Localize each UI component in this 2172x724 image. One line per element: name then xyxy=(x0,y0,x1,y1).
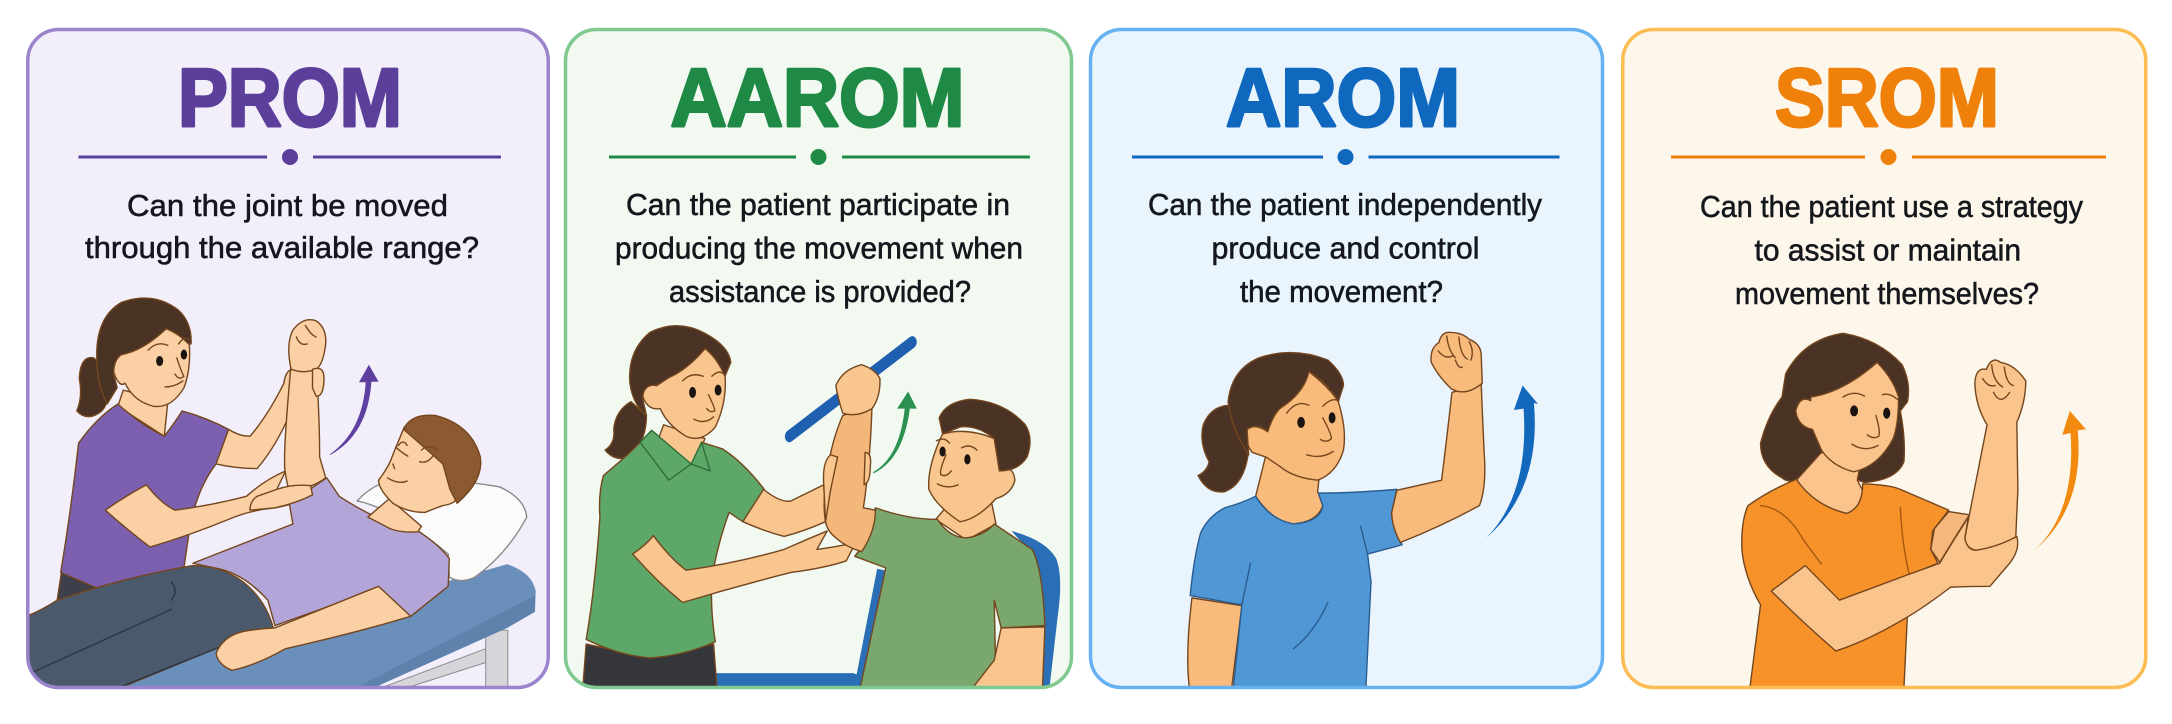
patient fist on stick xyxy=(836,365,880,415)
chair xyxy=(716,530,1060,686)
divider PROM xyxy=(78,149,501,165)
arrow: self-assisted lift xyxy=(2034,411,2086,551)
question SROM: to assist or maintain xyxy=(1754,234,2021,268)
treatment table xyxy=(107,564,536,689)
question SROM xyxy=(1700,190,2084,311)
divider AROM xyxy=(1132,149,1560,165)
panel: PROM xyxy=(26,30,548,689)
therapist xyxy=(583,326,856,689)
panel: AROM xyxy=(1090,30,1602,689)
title AROM: AROM xyxy=(1226,51,1460,144)
card background SROM xyxy=(1623,30,2146,688)
panel: SROM xyxy=(1623,30,2146,689)
therapist xyxy=(56,297,290,600)
illustration: patient supporting own elbow xyxy=(1742,333,2086,689)
card border PROM xyxy=(28,30,548,688)
illustration: patient raising arm independently xyxy=(1188,332,1538,689)
pillow xyxy=(357,478,527,581)
illustration: therapist assisting patient with a stick xyxy=(583,326,1060,689)
arrow: passive lift xyxy=(329,365,379,455)
question AAROM: producing the movement when xyxy=(615,232,1023,266)
question SROM: Can the patient use a strategy xyxy=(1700,190,2084,224)
title PROM: PROM xyxy=(178,51,402,144)
question AAROM: Can the patient participate in xyxy=(626,188,1010,222)
illustration: therapist moving a lying patient's arm xyxy=(26,298,536,689)
question SROM: movement themselves? xyxy=(1735,277,2039,311)
question AROM: the movement? xyxy=(1240,275,1443,309)
patient xyxy=(824,399,1045,689)
patient xyxy=(26,320,481,689)
patient xyxy=(1742,333,2026,689)
title AAROM: AAROM xyxy=(670,51,964,144)
arrow: assisted lift xyxy=(873,392,917,473)
divider AAROM xyxy=(609,149,1030,165)
question PROM xyxy=(85,189,479,265)
arrow: active lift xyxy=(1486,386,1538,538)
question AAROM: assistance is provided? xyxy=(669,275,971,309)
card background AAROM xyxy=(566,30,1072,688)
title SROM: SROM xyxy=(1775,51,1999,144)
question AAROM xyxy=(615,188,1023,309)
patient xyxy=(1188,332,1485,689)
card border SROM xyxy=(1623,30,2146,688)
card background PROM xyxy=(28,30,548,688)
question AROM: Can the patient independently xyxy=(1148,188,1543,222)
exercise stick xyxy=(789,342,912,436)
question AROM: produce and control xyxy=(1212,232,1480,266)
card border AROM xyxy=(1090,30,1602,688)
question AROM xyxy=(1148,188,1543,309)
panel: AAROM xyxy=(566,30,1072,689)
divider SROM xyxy=(1671,149,2106,165)
card background AROM xyxy=(1090,30,1602,688)
question PROM: Can the joint be moved xyxy=(127,189,448,223)
card border AAROM xyxy=(566,30,1072,688)
question PROM: through the available range? xyxy=(85,231,479,265)
